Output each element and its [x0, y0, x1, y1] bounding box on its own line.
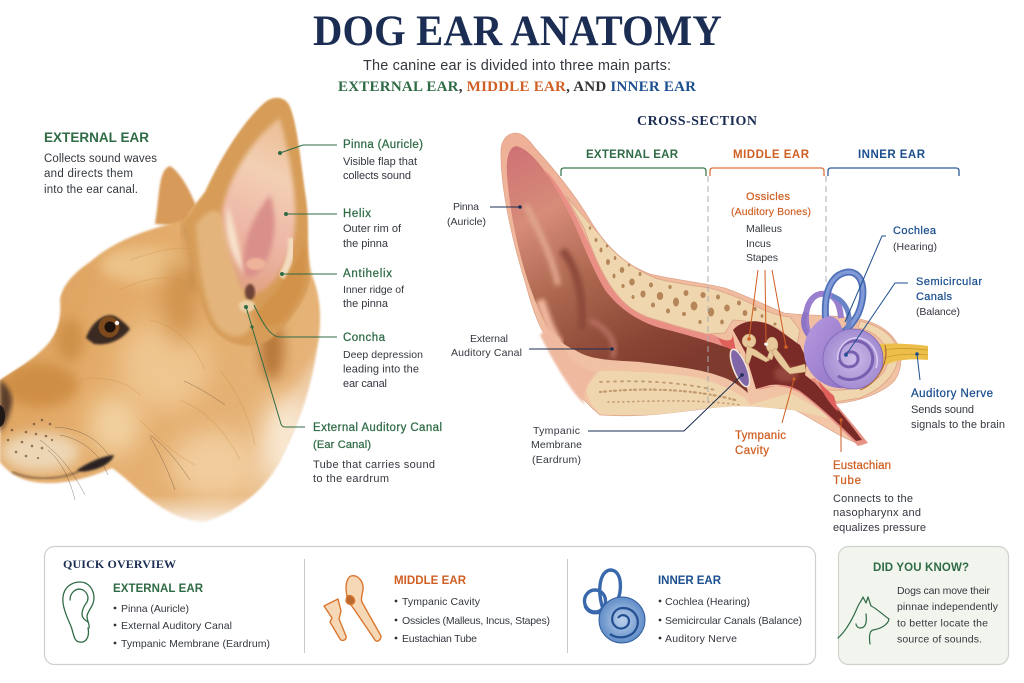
- label: external auditory canal: External Auditory Canal: [313, 422, 442, 434]
- label: concha: Concha: [343, 332, 386, 344]
- ear lower fold: [256, 240, 306, 326]
- panel: quick overview: [44, 546, 816, 664]
- subtitle: The canine ear is divided into three main parts:: [363, 58, 671, 74]
- label: eustachian tube: nasopharynx and: [833, 507, 921, 519]
- ossicles: [742, 334, 806, 374]
- nostril: [0, 405, 5, 427]
- brown edge: [860, 345, 886, 390]
- label: ossicles: Incus: [746, 238, 771, 250]
- pink ridge at canal roof: [718, 330, 736, 352]
- label: cochlea: Cochlea: [893, 225, 937, 237]
- external ear list: External Auditory Canal: [121, 620, 232, 632]
- eustachian tube wall: [757, 378, 868, 446]
- whiskers: [40, 381, 225, 500]
- label: helix: Helix: [343, 208, 371, 220]
- left description: into the ear canal.: [44, 184, 138, 196]
- muzzle spots: [7, 419, 53, 459]
- label: semicircular canals: [916, 276, 982, 318]
- lower bone: [584, 371, 835, 420]
- label: external auditory canal: Tube that carries sound: [313, 459, 435, 471]
- leader lines: external ear: [244, 145, 337, 427]
- did you know text: pinnae independently: [897, 601, 999, 613]
- cochlea spiral: [838, 338, 877, 380]
- head and neck: [0, 98, 320, 522]
- near ear: [186, 98, 310, 346]
- eardrum: [726, 347, 754, 389]
- label: pinna cross-section: [447, 201, 486, 228]
- panel: did you know: [838, 546, 1008, 664]
- section header: external ear: EXTERNAL EAR: [586, 149, 679, 161]
- icon: inner ear: [584, 570, 645, 643]
- did you know text: source of sounds.: [897, 634, 982, 646]
- ossicle node: [764, 342, 768, 346]
- label: helix: the pinna: [343, 238, 389, 250]
- label: antihelix: [343, 268, 404, 310]
- semicircular canals purple: [804, 294, 841, 340]
- external ear list: Pinna (Auricle): [121, 603, 189, 615]
- label: ossicles: (Auditory Bones): [731, 206, 811, 218]
- outer silhouette: [501, 133, 901, 445]
- mouth line: [76, 455, 114, 472]
- ear canal opening: [245, 284, 255, 300]
- middle ear list: Eustachian Tube: [402, 633, 477, 645]
- left description: Collects sound waves: [44, 153, 157, 165]
- nose: [0, 380, 12, 432]
- label: auditory nerve: Sends sound: [911, 404, 974, 416]
- external ear list: Tympanic Membrane (Eardrum): [121, 638, 270, 650]
- label: concha: ear canal: [343, 378, 387, 390]
- label: auditory nerve: signals to the brain: [911, 419, 1005, 431]
- tympanic cavity and tube lumen: [733, 321, 862, 441]
- label: ossicles: Stapes: [746, 252, 778, 264]
- rim fold light: [281, 238, 292, 277]
- leader lines: blue: [844, 236, 920, 380]
- did you know text: [897, 585, 999, 646]
- label: cochlea: [893, 225, 937, 253]
- icon: ossicles: [324, 576, 381, 641]
- label: eustachian tube: Connects to the: [833, 493, 913, 505]
- inner ear list: Semicircular Canals (Balance): [665, 615, 802, 627]
- ear cross-section illustration: [501, 133, 928, 446]
- label: tympanic membrane: [531, 425, 582, 466]
- leader lines: orange: [747, 270, 843, 452]
- bone pores lower: [600, 381, 740, 405]
- label: tympanic cavity: [735, 430, 786, 457]
- inner ear list: Cochlea (Hearing): [665, 596, 750, 608]
- leader lines: cross-section dark: [490, 205, 744, 431]
- subtitle parts line: EXTERNAL EAR, MIDDLE EAR, AND INNER EAR: [338, 79, 696, 95]
- label: eustachian tube: Tube: [833, 475, 861, 487]
- middle ear list: MIDDLE EAR: [394, 575, 467, 587]
- section brackets: [561, 168, 959, 176]
- tragus bump: [246, 258, 266, 270]
- lip line: [12, 472, 78, 478]
- label: ossicles: [731, 191, 811, 264]
- cavity lighter wash: [774, 366, 798, 382]
- label: ossicles: Ossicles: [746, 191, 790, 203]
- label: antihelix: Inner ridge of: [343, 284, 404, 296]
- top pink layer: [545, 170, 735, 352]
- label: pinna: [343, 139, 423, 182]
- ear fur lower left: [196, 211, 252, 336]
- label: auditory nerve: Auditory Nerve: [911, 388, 993, 400]
- upper bone: [566, 196, 800, 345]
- inner ear list: INNER EAR: [658, 575, 722, 587]
- label: external auditory canal: to the eardrum: [313, 473, 389, 485]
- label: concha: Deep depression: [343, 349, 423, 361]
- label: cochlea: (Hearing): [893, 241, 937, 253]
- cream base of canal: [239, 300, 255, 312]
- auditory nerve: [880, 344, 928, 368]
- icon: ear: [63, 582, 94, 642]
- quick overview heading: QUICK OVERVIEW: [63, 557, 176, 571]
- inner ear list: Auditory Nerve: [665, 633, 737, 645]
- external ear list: [113, 583, 270, 650]
- section header: inner ear: INNER EAR: [858, 149, 926, 161]
- label: concha: leading into the: [343, 364, 419, 376]
- cochlea: [823, 329, 883, 389]
- column dividers: [304, 559, 568, 653]
- bottom fade: [149, 497, 248, 524]
- title: DOG EAR ANATOMY: [313, 8, 722, 55]
- did you know text: to better locate the: [897, 618, 988, 630]
- label: tympanic cavity: Cavity: [735, 445, 769, 457]
- left description: and directs them: [44, 168, 133, 180]
- label: eustachian tube: equalizes pressure: [833, 522, 926, 534]
- label: helix: [343, 208, 402, 250]
- label: helix: Outer rim of: [343, 223, 402, 235]
- label: pinna cross-section: Pinna: [453, 201, 479, 213]
- label: tympanic membrane: (Eardrum): [532, 454, 581, 466]
- cross-section heading: CROSS-SECTION: [637, 114, 757, 129]
- label: tympanic membrane: Tympanic: [533, 425, 580, 437]
- label: external auditory canal cross-section: External: [470, 333, 508, 345]
- peach lobe: [540, 331, 598, 405]
- label: antihelix: the pinna: [343, 298, 389, 310]
- middle ear list: [394, 575, 550, 645]
- label: tympanic cavity: Tympanic: [735, 430, 786, 442]
- did you know heading: DID YOU KNOW?: [873, 562, 969, 574]
- label: eustachian tube: [833, 460, 926, 534]
- label: antihelix: Antihelix: [343, 268, 392, 280]
- section header: middle ear: MIDDLE EAR: [733, 149, 810, 161]
- label: external auditory canal cross-section: [451, 333, 522, 359]
- fur strands: [80, 248, 255, 465]
- label: external auditory canal cross-section: Auditory Canal: [451, 347, 522, 359]
- canal and inner pinna: [507, 146, 748, 393]
- inner ear list: [658, 575, 802, 645]
- right bone bulge: [826, 321, 898, 402]
- label: external auditory canal: (Ear Canal): [313, 439, 371, 451]
- ear pink core: [243, 195, 274, 277]
- label: semicircular canals: Semicircular: [916, 276, 982, 288]
- did you know text: Dogs can move their: [897, 585, 990, 597]
- semicircular canals blue: [825, 272, 863, 336]
- middle ear list: Ossicles (Malleus, Incus, Stapes): [402, 615, 550, 627]
- left heading: external ear: EXTERNAL EAR: [44, 130, 149, 145]
- label: pinna: Pinna (Auricle): [343, 139, 423, 151]
- label: tympanic membrane: Membrane: [531, 439, 582, 451]
- icon: dog: [838, 597, 889, 644]
- far ear: [155, 166, 197, 226]
- neck right fade: [248, 350, 316, 497]
- eye: [86, 315, 130, 344]
- lower red membrane near cochlea: [818, 380, 838, 412]
- dog head illustration: [0, 98, 330, 530]
- label: pinna: Visible flap that: [343, 156, 417, 168]
- label: external auditory canal: [313, 422, 442, 485]
- label: ossicles: Malleus: [746, 223, 782, 235]
- bone pores upper: [589, 226, 776, 326]
- label: pinna cross-section: (Auricle): [447, 216, 486, 228]
- cream fur strands: [226, 205, 246, 275]
- label: concha: [343, 332, 423, 390]
- region dashed dividers: [708, 176, 826, 405]
- ear inner pale: [222, 118, 295, 294]
- vestibule: [804, 316, 846, 388]
- pinna folds: [526, 205, 614, 358]
- label: semicircular canals: Canals: [916, 291, 952, 303]
- label: pinna: collects sound: [343, 170, 411, 182]
- label: auditory nerve: [911, 388, 1005, 431]
- left description: [44, 153, 157, 196]
- label: eustachian tube: Eustachian: [833, 460, 891, 472]
- middle ear list: Tympanic Cavity: [402, 596, 481, 608]
- label: semicircular canals: (Balance): [916, 306, 960, 318]
- fur light and shade: [0, 222, 311, 500]
- ear outer: [186, 98, 310, 346]
- external ear list: EXTERNAL EAR: [113, 583, 204, 595]
